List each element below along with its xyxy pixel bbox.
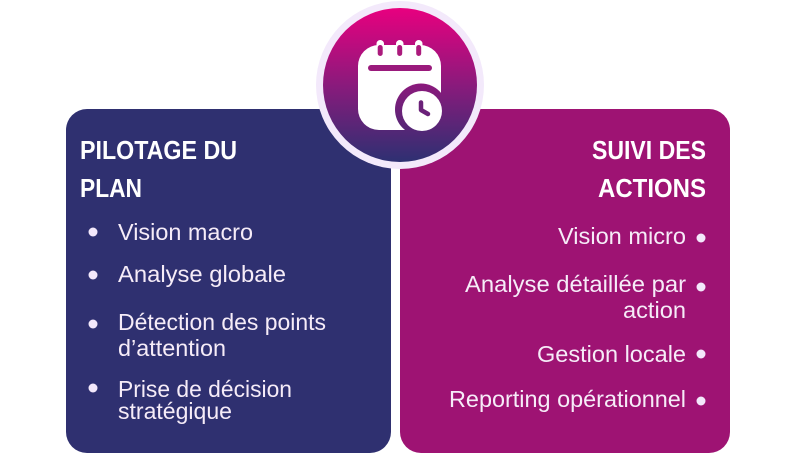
heading: suivi des actions: ACTIONS — [598, 173, 706, 203]
list item: prise de décision stratégique — [88, 376, 292, 424]
list item: détection des points d'attention — [88, 309, 326, 361]
list item: analyse détaillée par action: Analyse détaillée par — [465, 271, 686, 297]
badge: calendar with clock icon — [316, 1, 484, 169]
heading: pilotage du plan: PILOTAGE DU — [80, 135, 237, 165]
list item: reporting opérationnel: Reporting opérationnel — [449, 386, 686, 412]
list item: analyse globale: Analyse globale — [118, 261, 286, 287]
list item: prise de décision stratégique: Prise de décision — [118, 376, 292, 402]
heading: pilotage du plan — [80, 135, 237, 203]
list item: analyse détaillée par action — [465, 271, 706, 323]
heading: pilotage du plan: PLAN — [80, 173, 142, 203]
heading: suivi des actions: SUIVI DES — [592, 135, 706, 165]
list item: vision micro: Vision micro — [558, 223, 686, 249]
panel: suivi des actions — [400, 109, 730, 453]
icon: calendar — [358, 40, 441, 130]
list item: détection des points d'attention: Détection des points — [118, 309, 326, 335]
heading: suivi des actions — [592, 135, 706, 203]
panel: pilotage du plan — [66, 109, 391, 453]
list item: gestion locale: Gestion locale — [537, 341, 686, 367]
icon: clock — [395, 84, 447, 136]
list item: prise de décision stratégique: stratégique — [118, 398, 232, 424]
list item: détection des points d'attention: d’attention — [118, 335, 226, 361]
list item: vision macro: Vision macro — [118, 219, 253, 245]
list item: analyse détaillée par action: action — [623, 297, 686, 323]
